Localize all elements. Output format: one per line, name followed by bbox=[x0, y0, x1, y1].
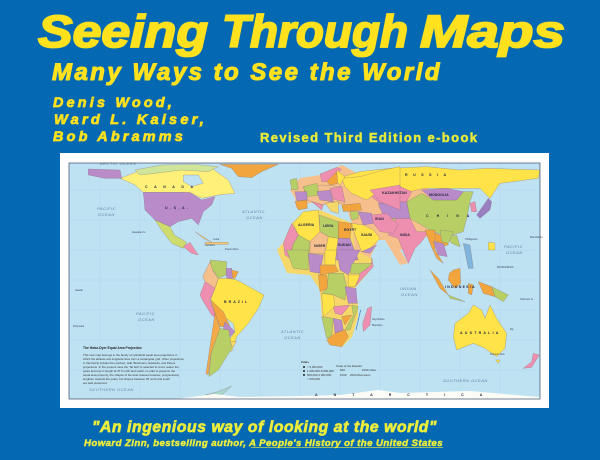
country and ocean labels: Mauritius bbox=[372, 323, 383, 327]
subtitle: Many Ways to See the World bbox=[52, 59, 442, 86]
projection note: are well preserved. bbox=[83, 381, 108, 385]
authors: Ward L. Kaiser, bbox=[54, 112, 207, 127]
country and ocean labels: SOUTHERN OCEAN bbox=[443, 378, 488, 383]
title: Maps bbox=[420, 6, 565, 57]
country and ocean labels: Puerto Rico bbox=[225, 247, 239, 251]
asia bbox=[343, 167, 540, 263]
map legend: Scale at the Equator bbox=[336, 364, 362, 368]
country and ocean labels: MICRONESIA bbox=[497, 265, 514, 269]
country and ocean labels: OCEAN bbox=[401, 292, 418, 297]
country and ocean labels: IRAN bbox=[375, 217, 384, 221]
north america bbox=[88, 164, 278, 255]
projection note: projections. In the present case the "fat belt" is selected to cross nearer the bbox=[83, 365, 179, 369]
map legend: 500,000-1,000,000 bbox=[307, 373, 332, 377]
country and ocean labels: RUSSIA bbox=[405, 173, 452, 177]
map artwork bbox=[69, 163, 540, 399]
map legend: Cities bbox=[301, 360, 309, 364]
antarctica bbox=[175, 390, 540, 399]
country and ocean labels: OCEAN bbox=[284, 335, 301, 340]
title: Seeing bbox=[38, 6, 208, 57]
country and ocean labels: PACIFIC bbox=[136, 311, 155, 316]
authors: Denis Wood, bbox=[53, 95, 175, 110]
country and ocean labels: AUSTRALIA bbox=[460, 331, 501, 335]
map legend bbox=[301, 360, 377, 381]
country and ocean labels: MONGOLIA bbox=[429, 193, 449, 197]
country and ocean labels: EGYPT bbox=[344, 228, 357, 232]
country and ocean labels: OCEAN bbox=[506, 250, 523, 255]
country and ocean labels: OCEAN bbox=[138, 317, 155, 322]
country and ocean labels: INDIAN bbox=[400, 286, 417, 291]
authors bbox=[53, 95, 207, 144]
country and ocean labels: SUDAN bbox=[338, 243, 351, 247]
map legend: < 500,000 bbox=[307, 377, 320, 381]
country and ocean labels: Solomon Is. bbox=[520, 297, 534, 301]
southeast asia bbox=[425, 230, 508, 302]
title bbox=[38, 6, 565, 57]
edition label: Revised Third Edition e-book bbox=[260, 130, 478, 145]
title: Through bbox=[222, 6, 408, 57]
map legend: 500 bbox=[340, 368, 345, 372]
country and ocean labels: ARCTIC OCEAN bbox=[99, 161, 136, 166]
country and ocean labels: SOUTHERN OCEAN bbox=[89, 387, 134, 392]
ocean bbox=[69, 163, 540, 399]
country and ocean labels: U.S.A. bbox=[165, 206, 191, 210]
country and ocean labels: Hawaii bbox=[75, 288, 83, 292]
map legend: 1000 miles bbox=[362, 368, 377, 372]
country and ocean labels: ANTARCTICA bbox=[315, 393, 498, 397]
europe, north africa and middle east bbox=[283, 167, 400, 260]
country and ocean labels: Tasman Sea bbox=[490, 352, 505, 356]
projection note bbox=[83, 346, 184, 385]
africa south bbox=[287, 250, 373, 347]
projection note: which the latitude and longitude lines form a rectangular grid. Other projections bbox=[83, 357, 184, 361]
country and ocean labels: SAUDI bbox=[361, 233, 372, 237]
south america south bbox=[205, 313, 232, 395]
country and ocean labels: Jamaica bbox=[205, 243, 215, 247]
map legend: 2000 kilometers bbox=[350, 373, 371, 377]
country and ocean labels bbox=[73, 161, 544, 397]
country and ocean labels: Philippines bbox=[465, 237, 478, 241]
country and ocean labels: PACIFIC bbox=[504, 244, 523, 249]
south america north bbox=[200, 260, 264, 352]
map frame bbox=[60, 153, 549, 408]
graticule bbox=[69, 163, 540, 399]
country and ocean labels: NIGER bbox=[314, 244, 326, 248]
country and ocean labels: Seychelles bbox=[372, 317, 385, 321]
country and ocean labels: INDIA bbox=[400, 233, 410, 237]
land base: africa bbox=[277, 210, 373, 347]
world map bbox=[69, 161, 544, 399]
map border bbox=[69, 163, 540, 399]
projection note: in this family include the Lambert, Gall, Behrmann, Edwards, and Peters bbox=[83, 361, 176, 365]
country and ocean labels: PACIFIC bbox=[97, 206, 116, 211]
map legend: 1000 bbox=[340, 373, 347, 377]
land base: eurasia bbox=[290, 165, 430, 265]
country and ocean labels: Polynesia bbox=[73, 324, 85, 328]
authors: Bob Abramms bbox=[53, 129, 186, 144]
australia and new zealand bbox=[453, 305, 539, 368]
country and ocean labels: OCEAN bbox=[246, 215, 263, 220]
country and ocean labels: Cuba bbox=[213, 237, 220, 241]
country and ocean labels: Marshall Is. bbox=[530, 235, 544, 239]
country and ocean labels: Hawaiian Is. bbox=[132, 230, 146, 234]
projection note: poles and true in length at 37.5 north and south, in order to preserve the bbox=[83, 369, 175, 373]
country and ocean labels: BRAZIL bbox=[224, 300, 249, 304]
country and ocean labels: OCEAN bbox=[98, 212, 115, 217]
country and ocean labels: CHINA bbox=[426, 214, 477, 218]
country and ocean labels: ALGERIA bbox=[298, 223, 315, 227]
country and ocean labels: INDONESIA bbox=[445, 285, 476, 289]
projection note: lengthen towards the poles, but shapes between 35 north and south bbox=[83, 377, 170, 381]
country and ocean labels: CANADA bbox=[145, 185, 200, 189]
attribution: Howard Zinn, bestselling author, A People's History of the United States bbox=[84, 438, 443, 449]
projection note: equal area property; the shapes of the land masses however, progressively bbox=[83, 373, 180, 377]
quote: "An ingenious way of looking at the world" bbox=[92, 419, 437, 436]
projection note: This new map belongs to the family of cylindrical equal area projections in bbox=[83, 353, 178, 357]
country and ocean labels: ATLANTIC bbox=[280, 329, 304, 334]
projection note: The Hobo-Dyer Equal Area Projection bbox=[83, 346, 142, 350]
country and ocean labels: KAZAKHSTAN bbox=[382, 191, 407, 195]
country and ocean labels: Fiji bbox=[510, 327, 514, 331]
map legend: > 5,000,000 bbox=[307, 365, 323, 369]
country and ocean labels: ATLANTIC bbox=[241, 209, 265, 214]
country and ocean labels: LIBYA bbox=[323, 224, 334, 228]
map legend: 1,000,000-5,000,000 bbox=[307, 369, 334, 373]
